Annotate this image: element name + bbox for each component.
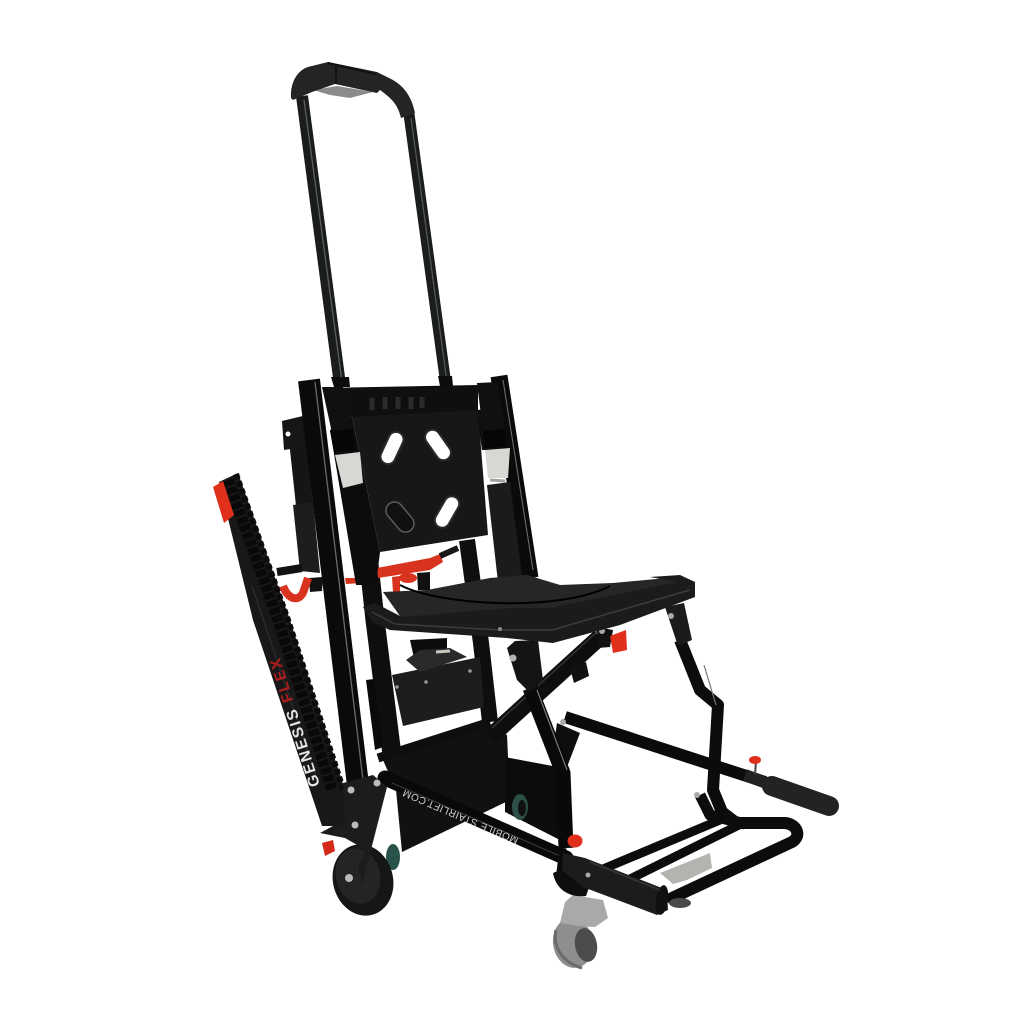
side plate	[320, 775, 387, 885]
backrest frame posts	[309, 376, 533, 785]
battery pack	[392, 638, 484, 726]
red knob	[322, 840, 335, 856]
track lettering: GENESIS FLEX	[267, 654, 324, 789]
rear wheel	[325, 837, 401, 923]
back panel	[322, 385, 506, 585]
seat belts and buckles	[322, 382, 525, 600]
front grip	[553, 853, 670, 916]
diagonal brace	[378, 627, 627, 758]
rail lettering: MOBILE STAIRLIFT.COM	[401, 786, 520, 845]
lower rail	[385, 778, 582, 872]
front seat leg	[507, 640, 567, 848]
folding footrest	[603, 792, 797, 908]
rear auxiliary rail and bracket	[277, 415, 323, 592]
telescoping handle	[291, 62, 453, 387]
caster wheel	[549, 895, 608, 971]
motor housing	[383, 725, 563, 852]
vent holes	[378, 427, 462, 535]
red release lever	[283, 548, 458, 598]
seat	[363, 575, 695, 643]
inner lower rails	[366, 540, 490, 755]
caterpillar track	[213, 473, 345, 826]
foot bar with grip	[553, 717, 829, 806]
red knob	[568, 834, 582, 848]
right seat support leg	[665, 603, 735, 822]
red latch	[610, 630, 627, 653]
